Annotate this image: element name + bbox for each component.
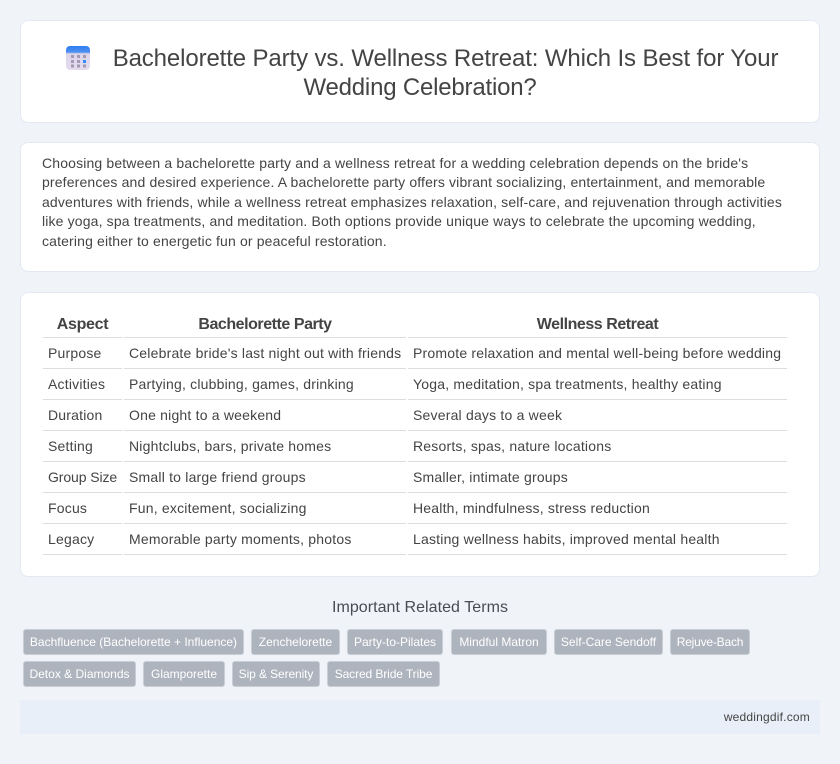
title — [113, 45, 778, 101]
row: purpose: Celebrate bride's last night out with friends — [129, 345, 401, 361]
row: setting: Setting — [48, 438, 93, 454]
title: Wedding Celebration? — [303, 74, 537, 101]
row: focus: Health, mindfulness, stress reduction — [413, 500, 650, 516]
row: group size — [48, 469, 568, 485]
tag — [347, 629, 443, 655]
row: activities: Activities — [48, 376, 105, 392]
tag — [554, 629, 663, 655]
tag: Sip & Serenity — [239, 667, 313, 681]
tag: Party-to-Pilates — [354, 635, 436, 649]
tag: Detox & Diamonds — [29, 667, 130, 681]
intro text: Choosing between a bachelorette party and a wellness retreat for a wedding celebration depends on the bride's — [42, 154, 748, 170]
row: legacy — [48, 531, 720, 547]
intro text: like yoga, spa treatments, and meditation. Both options provide unique ways to celebrate the upcoming wedding, — [42, 213, 756, 229]
tag — [23, 661, 136, 687]
row: activities: Yoga, meditation, spa treatments, healthy eating — [413, 376, 722, 392]
row: group size: Smaller, intimate groups — [413, 469, 568, 485]
intro text — [42, 154, 782, 249]
header row: Bachelorette Party — [198, 316, 332, 333]
row: setting: Resorts, spas, nature locations — [413, 438, 611, 454]
row: purpose: Promote relaxation and mental well-being before wedding — [413, 345, 781, 361]
row: group size: Group Size — [48, 469, 117, 485]
row: duration: Several days to a week — [413, 407, 562, 423]
row: duration — [48, 407, 562, 423]
row: focus — [48, 500, 650, 516]
header row: Wellness Retreat — [537, 316, 658, 333]
tag — [143, 661, 225, 687]
row: legacy: Legacy — [48, 531, 94, 547]
row: focus: Focus — [48, 500, 87, 516]
row: duration: Duration — [48, 407, 103, 423]
intro text: catering either to energetic fun or peaceful restoration. — [42, 233, 387, 249]
row: focus: Fun, excitement, socializing — [129, 500, 307, 516]
row: purpose: Purpose — [48, 345, 102, 361]
title card — [20, 20, 820, 123]
tag — [251, 629, 340, 655]
panel: comparison table — [20, 292, 820, 577]
tag: Self-Care Sendoff — [561, 635, 656, 649]
tag: Sacred Bride Tribe — [335, 667, 432, 681]
footer text: weddingdif.com — [724, 710, 810, 724]
row: setting: Nightclubs, bars, private homes — [129, 438, 331, 454]
row: purpose — [48, 345, 781, 361]
row: setting — [48, 438, 611, 454]
tag: Zenchelorette — [259, 635, 332, 649]
tag — [327, 661, 440, 687]
row: activities — [48, 376, 722, 392]
tag — [670, 629, 750, 655]
row: legacy: Lasting wellness habits, improved mental health — [413, 531, 720, 547]
tag: Mindful Matron — [459, 635, 539, 649]
tag — [23, 629, 244, 655]
tag: Glamporette — [151, 667, 217, 681]
title: Bachelorette Party vs. Wellness Retreat: Which Is Best for Your — [113, 45, 778, 72]
row: legacy: Memorable party moments, photos — [129, 531, 352, 547]
tag: Bachfluence (Bachelorette + Influence) — [30, 635, 237, 649]
header row: Aspect — [57, 316, 108, 333]
intro text: preferences and desired experience. A bachelorette party offers vibrant socializing, entertainment, and memorable — [42, 174, 765, 190]
row: group size: Small to large friend groups — [129, 469, 306, 485]
header row — [57, 316, 658, 333]
tag — [451, 629, 547, 655]
tag — [232, 661, 320, 687]
icon: calendar — [66, 46, 90, 70]
row: activities: Partying, clubbing, games, drinking — [129, 376, 354, 392]
row: duration: One night to a weekend — [129, 407, 281, 423]
footer bar — [20, 700, 820, 734]
comparison table — [43, 316, 787, 555]
related terms tags — [23, 629, 750, 687]
intro text: adventures with friends, while a wellness retreat emphasizes relaxation, self-care, and rejuvenation through activities — [42, 194, 782, 210]
panel: introduction — [20, 142, 820, 272]
heading: related terms: Important Related Terms — [332, 599, 508, 616]
tag: Rejuve-Bach — [677, 635, 743, 649]
